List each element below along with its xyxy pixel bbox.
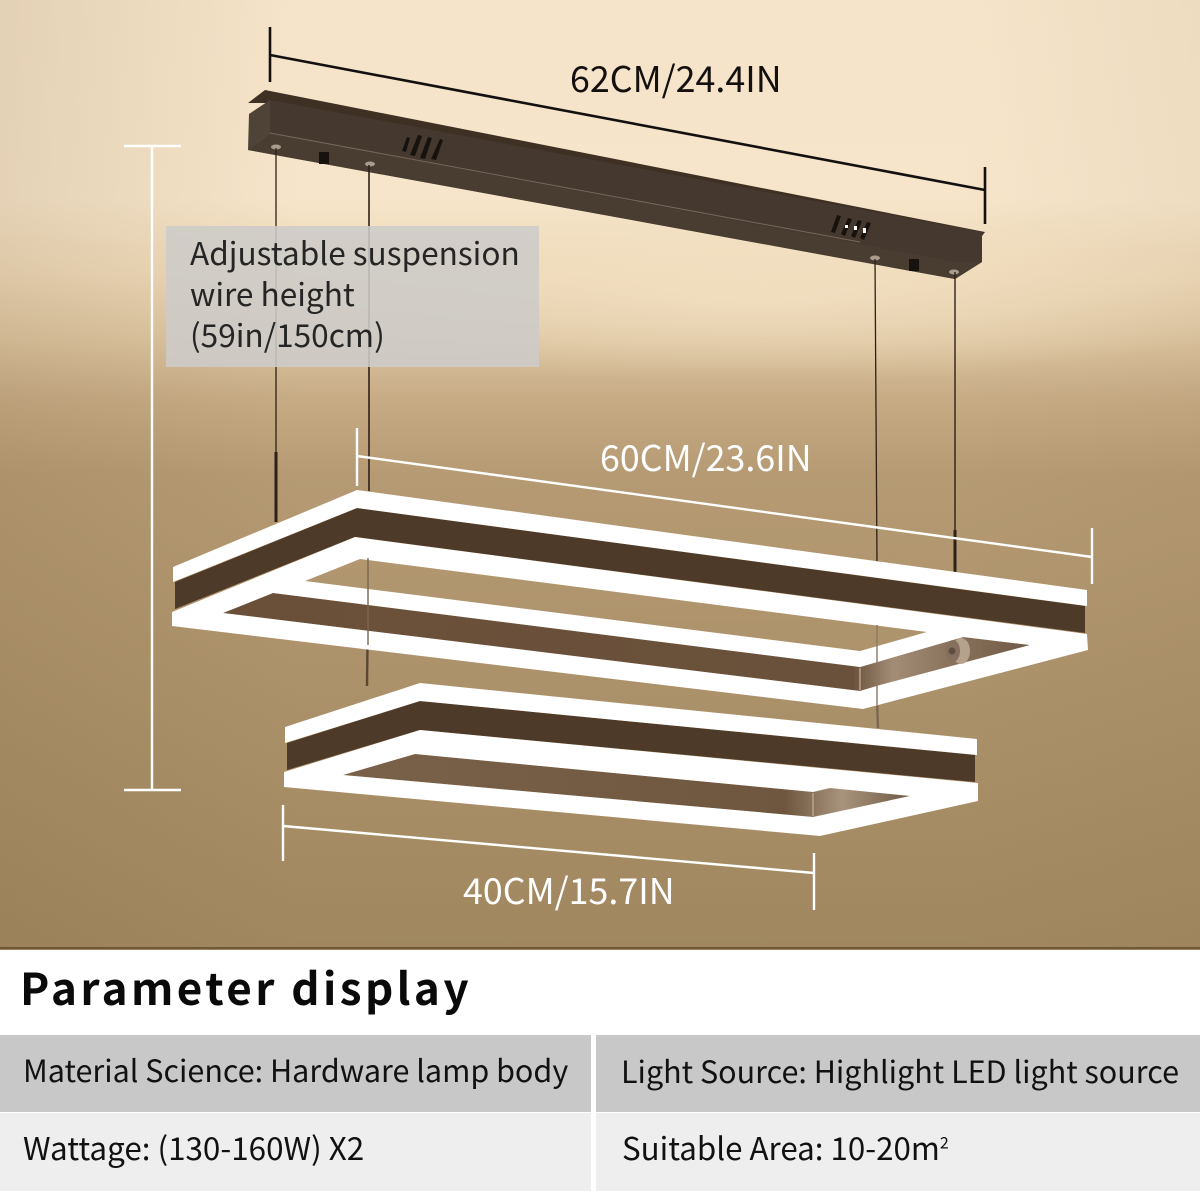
cell: wattage: Wattage: (130-160W) X2: [23, 1125, 364, 1170]
cell: light source: Light Source: Highlight LED light source: [621, 1048, 1179, 1092]
cell: wattage: [0, 1113, 591, 1191]
icon: driver knob: [946, 638, 970, 664]
callout: adjustable wire height: Adjustable suspension: [190, 229, 520, 275]
dimension: wire height: [124, 146, 181, 790]
dimension: 60CM width of upper ring: [357, 428, 1092, 584]
cell: light source: [596, 1035, 1200, 1112]
callout: adjustable wire height: [166, 226, 539, 367]
suspension wires: [276, 148, 955, 728]
heading: Parameter display: Parameter display: [20, 954, 472, 1018]
label: 40CM/15.7IN: 40CM/15.7IN: [463, 863, 675, 915]
wall background: [0, 0, 1200, 950]
cell: suitable area: [596, 1113, 1200, 1191]
parameter table: [0, 1035, 1200, 1191]
callout: adjustable wire height: wire height: [190, 270, 355, 316]
lower rectangular lamp ring: [284, 683, 978, 836]
label: 62CM/24.4IN: 62CM/24.4IN: [570, 51, 782, 103]
ceiling canopy: [248, 90, 985, 279]
product photo: pendant lamp with dimensions: [0, 0, 1200, 950]
cell: material: [0, 1035, 591, 1112]
cell: suitable area: Suitable Area: 10-20m2: [622, 1125, 949, 1170]
dimension: 40CM width of lower ring: [283, 805, 814, 910]
cell: material: Material Science: Hardware lamp body: [23, 1047, 568, 1091]
label: 60CM/23.6IN: 60CM/23.6IN: [600, 430, 812, 482]
dimension: 62CM width of canopy: [270, 27, 985, 224]
upper rectangular lamp ring: [172, 490, 1088, 709]
callout: adjustable wire height: (59in/150cm): [190, 311, 385, 357]
